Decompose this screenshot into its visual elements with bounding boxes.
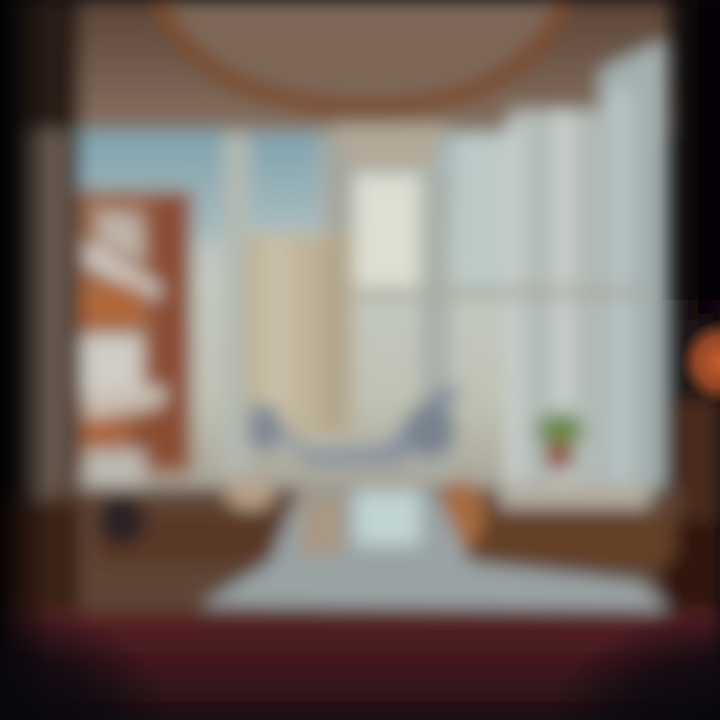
- central tower: [246, 235, 354, 435]
- hammock chair: [240, 385, 465, 465]
- floor: [0, 488, 720, 620]
- right sofa: [440, 480, 675, 564]
- bookshelf: [80, 190, 192, 485]
- ceiling: [60, 0, 670, 140]
- right wall: [668, 0, 720, 720]
- dark bottom-right corner: [550, 610, 720, 720]
- windows: [80, 40, 665, 490]
- right lamp glow: [640, 320, 720, 404]
- left curtain: [0, 0, 80, 720]
- glass table: [200, 490, 670, 610]
- window mullions: [224, 90, 645, 490]
- potted plant: [536, 412, 584, 470]
- dark bottom-left corner: [0, 600, 170, 720]
- left sofa: [95, 481, 280, 564]
- dark right edge: [660, 0, 720, 300]
- ceiling arch: [158, 0, 565, 108]
- carpet: [0, 612, 720, 720]
- dark left edge: [0, 0, 50, 720]
- ceiling lamp: [335, 125, 450, 170]
